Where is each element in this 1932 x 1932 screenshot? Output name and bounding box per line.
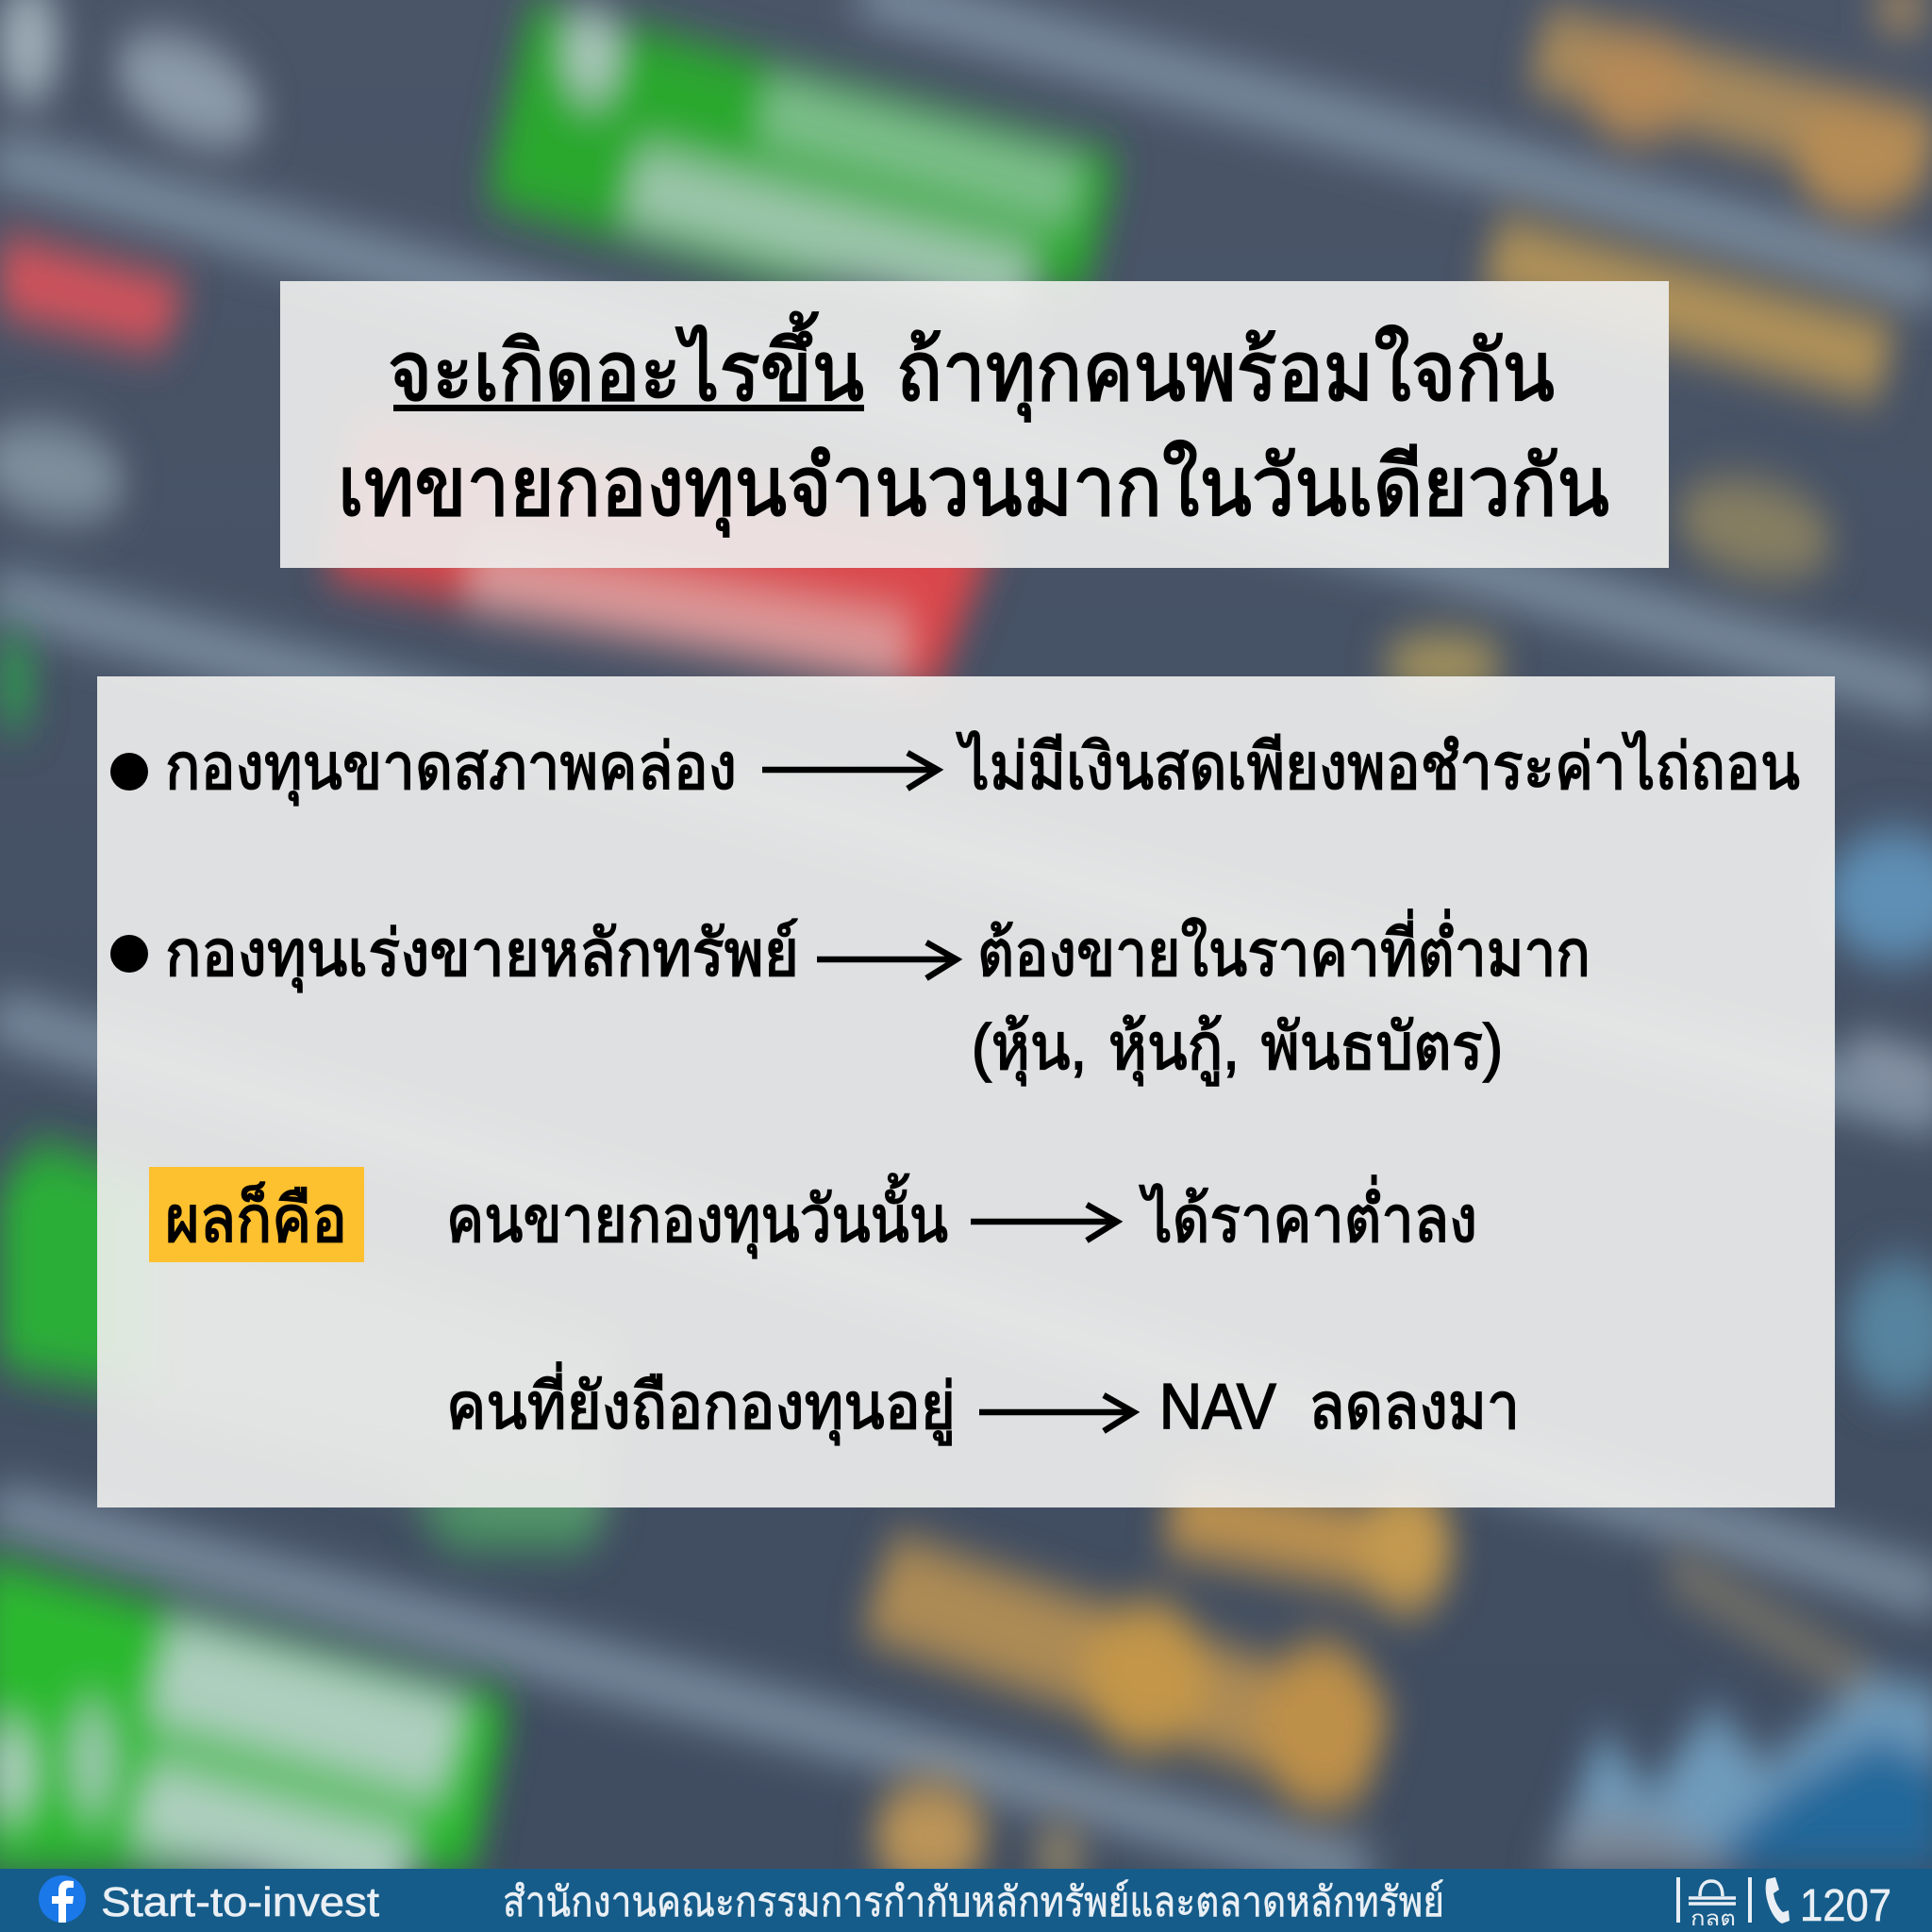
text: facebook page: Start-to-invest [101,1879,379,1925]
icon: sec logo [1676,1877,1752,1930]
text: no cash: ไม่มีเงินสดเพียงพอชำระค่าไถ่ถอน [956,730,1800,803]
panel: title [280,281,1669,568]
callout: result badge: ผลก็คือ [165,1182,347,1256]
text: hotline: 1207 [1800,1881,1891,1931]
text: agency name: สำนักงานคณะกรรมการกำกับหลักทรัพย์และตลาดหลักทรัพย์ [503,1879,1444,1925]
title line 2: เทขายกองทุนจำนวนมากในวันเดียวกัน [338,440,1609,537]
icon: facebook [39,1875,86,1923]
title line 1 rest: ถ้าทุกคนพร้อมใจกัน [896,325,1555,422]
row 3 [446,1174,1477,1258]
text: fund lacks liquidity: กองทุนขาดสภาพคล่อง [165,731,737,806]
callout: result badge [149,1167,364,1262]
icon: bullet [110,753,148,791]
panel: main content [97,676,1835,1507]
arrow [817,942,957,978]
arrow [979,1395,1134,1431]
footer bar [0,1869,1932,1932]
arrow [762,753,938,789]
icon: sec logo: กลต [1690,1907,1736,1930]
text: lower price: ได้ราคาต่ำลง [1140,1175,1477,1256]
row 1 [110,730,1800,806]
row 2 [110,909,1591,1086]
text: NAV falls: NAV ลดลงมา [1159,1371,1520,1442]
text: sellers that day: คนขายกองทุนวันนั้น [446,1174,948,1258]
title line 1 underlined: จะเกิดอะไรขึ้น [388,312,864,418]
text: fund rushes to sell: กองทุนเร่งขายหลักทรัพย์ [165,918,799,992]
arrow [971,1205,1117,1241]
icon: bullet [110,935,148,973]
row 4 [446,1362,1520,1445]
icon: phone [1766,1877,1790,1924]
text: securities list: (หุ้น, หุ้นกู้, พันธบัตร) [972,1011,1503,1086]
title underline [393,405,864,411]
text: holders: คนที่ยังถือกองทุนอยู่ [446,1362,956,1445]
text: must sell low: ต้องขายในราคาที่ต่ำมาก [977,909,1591,990]
